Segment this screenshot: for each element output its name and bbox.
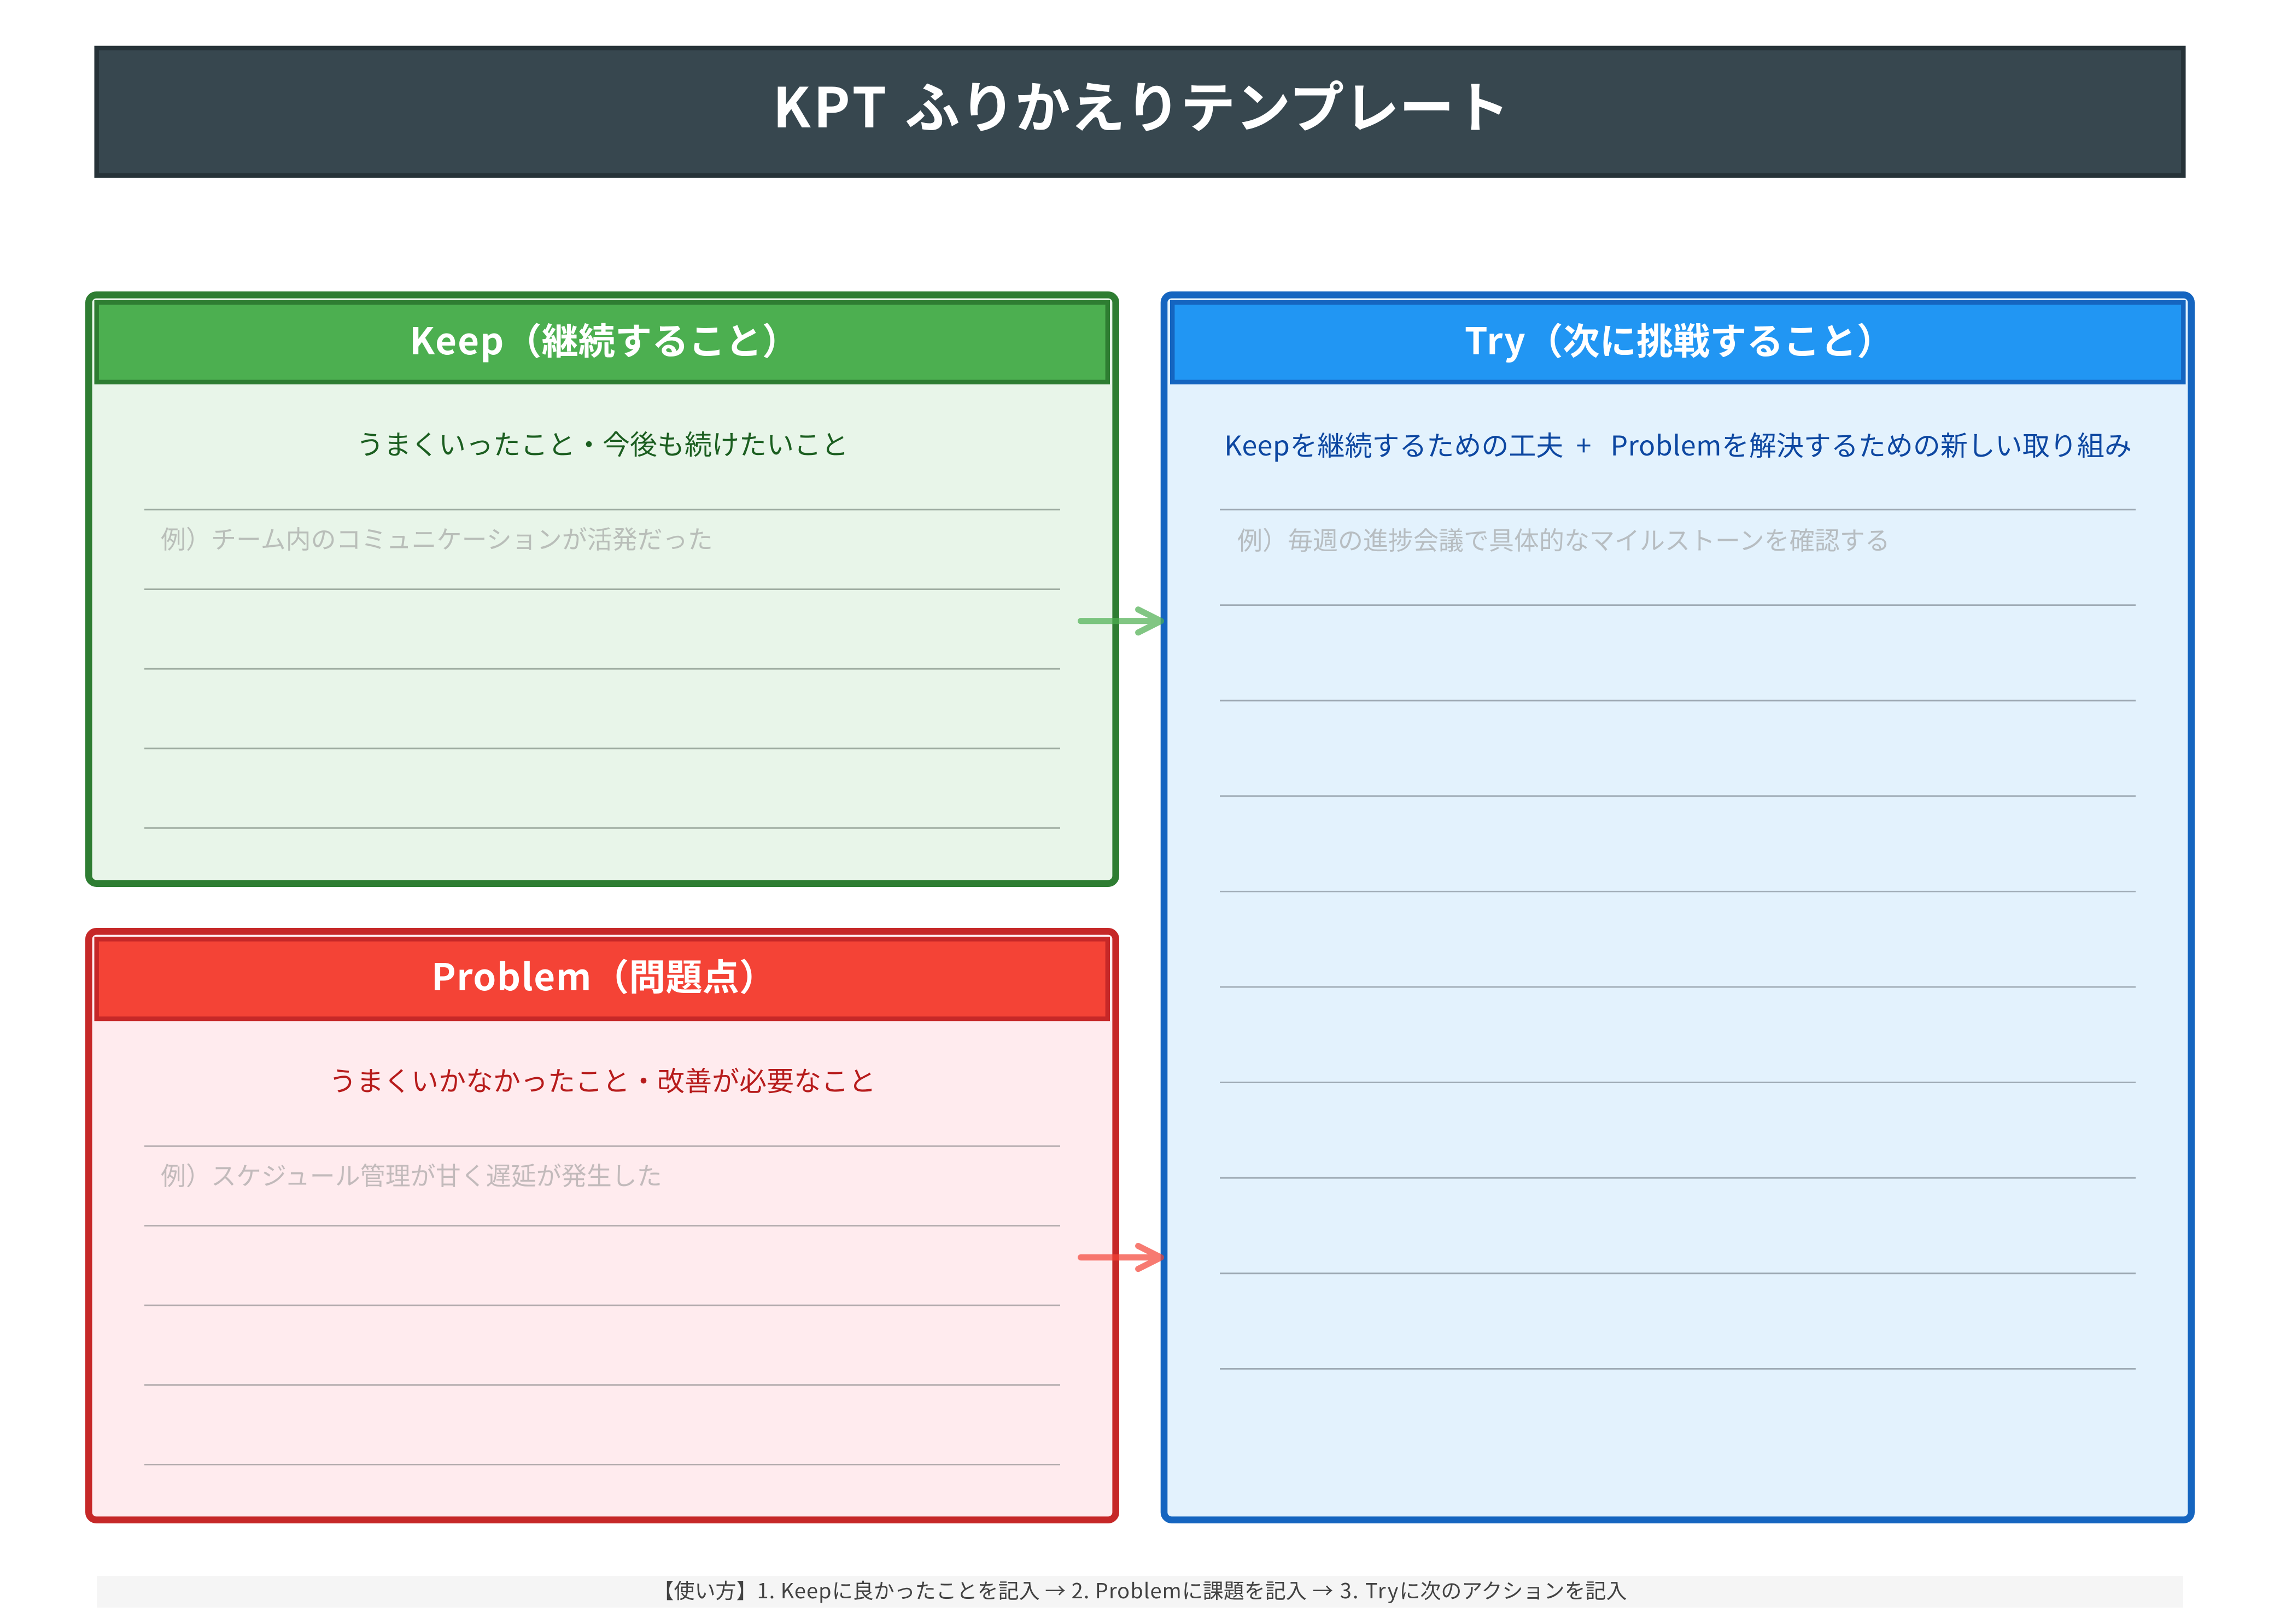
footer: how to use: 【使い方】1. Keepに良かったことを記入 → 2. Problemに課題を記入 → 3. Tryに次のアクションを記入: [653, 1574, 1627, 1604]
heading: Problem: Problem（問題点）: [431, 948, 776, 1001]
arrow: Problem to Try: [1081, 1246, 1161, 1269]
example text: Try: 例）毎週の進捗会議で具体的なマイルストーンを確認する: [1237, 521, 1890, 557]
writing lines: Keep: [144, 510, 1060, 828]
heading: Keep: Keep（継続すること）: [410, 312, 799, 365]
example text: Problem: 例）スケジュール管理が甘く遅延が発生した: [161, 1156, 662, 1193]
heading: Try: Try（次に挑戦すること）: [1465, 312, 1893, 365]
writing lines: Try: [1220, 510, 2136, 1369]
panel: Try: [1164, 295, 2191, 1520]
title banner: KPT ふりかえりテンプレート: [773, 64, 1510, 144]
arrow: Keep to Try: [1081, 610, 1161, 633]
heading: Keep: [97, 302, 1108, 382]
subtitle: Keep: うまくいったこと・今後も続けたいこと: [356, 423, 849, 463]
panel: Keep: [89, 295, 1116, 884]
title banner: [97, 48, 2183, 176]
footer: how to use: [97, 1574, 2183, 1608]
heading: Problem: [97, 939, 1108, 1019]
subtitle: Try: Keepを継続するための工夫 + Problemを解決するための新しい取り組み: [1224, 424, 2132, 464]
panel: Problem: [89, 931, 1116, 1520]
example text: Keep: 例）チーム内のコミュニケーションが活発だった: [161, 520, 713, 556]
subtitle: Problem: うまくいかなかったこと・改善が必要なこと: [329, 1060, 876, 1099]
writing lines: Problem: [144, 1146, 1060, 1464]
heading: Try: [1172, 302, 2183, 382]
